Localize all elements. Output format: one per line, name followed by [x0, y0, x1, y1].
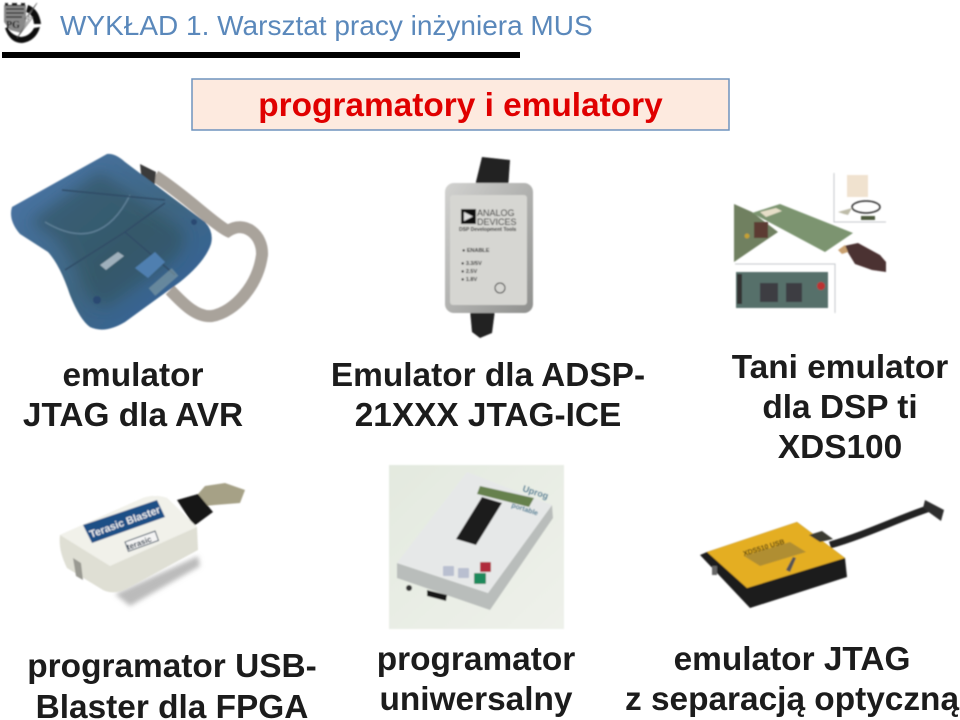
logo	[4, 3, 41, 43]
header rule	[2, 52, 520, 58]
dark inner tint	[30, 172, 184, 306]
label: emulator JTAG z separacją optyczną	[625, 641, 959, 718]
connector	[923, 500, 944, 521]
label: programator uniwersalny: programator	[377, 641, 575, 678]
photo: blue AVR JTAG emulator	[11, 154, 262, 330]
logo: PG	[6, 20, 20, 31]
photo: Terasic USB-Blaster: terasic	[126, 534, 153, 552]
photo: Terasic USB-Blaster: Terasic Blaster	[88, 504, 162, 541]
details	[744, 542, 806, 566]
label: Emulator dla ADSP-21XXX JTAG-ICE: 21XXX JTAG-ICE	[355, 397, 621, 434]
device branding: Uprog	[521, 483, 550, 501]
label: emulator JTAG dla AVR: JTAG dla AVR	[23, 397, 243, 434]
photo: universal programmer: portable	[510, 502, 539, 517]
photo: Analog Devices emulator: ● ENABLE	[462, 248, 490, 254]
frame lines	[735, 173, 886, 313]
connector port	[427, 590, 447, 601]
label: emulator JTAG dla AVR	[23, 357, 243, 434]
label: Tani emulator dla DSP ti XDS100: dla DSP ti	[762, 389, 918, 426]
heading box	[192, 79, 729, 130]
terasic logo	[125, 531, 158, 551]
photo: Analog Devices emulator: DEVICES	[477, 217, 517, 227]
label: Emulator dla ADSP-21XXX JTAG-ICE: Emulator dla ADSP-	[331, 357, 645, 394]
photo: Analog Devices emulator	[445, 157, 533, 338]
photo: XDS100 emulator boards	[734, 173, 886, 313]
blue label	[83, 500, 165, 543]
ZIF socket	[456, 497, 502, 545]
photo: yellow isolated JTAG emulator: XDS510 USB	[743, 539, 786, 558]
label: emulator JTAG z separacją optyczną: z separacją optyczną	[625, 681, 959, 718]
photo: yellow isolated JTAG emulator	[700, 500, 944, 608]
connector	[140, 164, 156, 190]
photo: Analog Devices emulator: ● 3.3/5V	[461, 261, 482, 267]
photo: Analog Devices emulator: ANALOG	[477, 208, 515, 218]
label: programator uniwersalny	[377, 641, 575, 718]
ribbon	[198, 483, 245, 506]
shadow	[115, 556, 200, 606]
label: Tani emulator dla DSP ti XDS100	[732, 349, 948, 466]
photo: Terasic USB-Blaster	[60, 483, 245, 606]
accessories	[847, 175, 868, 197]
photo: Analog Devices emulator: ● 1.8V	[461, 277, 477, 283]
heading box: programatory i emulatory	[258, 87, 663, 124]
label: programator USB-Blaster dla FPGA	[27, 648, 317, 720]
label: emulator JTAG dla AVR: emulator	[62, 357, 204, 394]
black case	[700, 522, 847, 608]
device body	[11, 154, 212, 330]
buttons	[443, 566, 454, 576]
body	[60, 496, 198, 592]
USB plug and cable	[844, 243, 886, 272]
USB port	[73, 558, 83, 580]
photo: Analog Devices emulator: ● 2.5V	[461, 269, 477, 275]
device logo and text	[461, 209, 476, 224]
photo: Analog Devices emulator: DSP Development Tools	[459, 227, 517, 233]
label: programator uniwersalny: uniwersalny	[380, 681, 573, 718]
cable straps	[474, 157, 510, 190]
photo background	[389, 465, 564, 629]
device front	[397, 505, 553, 610]
ribbon cable	[155, 176, 262, 316]
label: emulator JTAG z separacją optyczną: emulator JTAG	[674, 641, 910, 678]
title: WYKŁAD 1. Warsztat pracy inżyniera MUS	[60, 10, 593, 41]
photo: universal programmer	[389, 465, 564, 629]
target board	[734, 204, 778, 262]
label: Tani emulator dla DSP ti XDS100: XDS100	[778, 429, 902, 466]
yellow lid	[707, 522, 845, 588]
black connector	[177, 494, 213, 526]
device body	[445, 183, 533, 313]
label: programator USB-Blaster dla FPGA: programator USB-	[27, 648, 317, 685]
LCD display	[477, 486, 534, 507]
lower board	[736, 272, 828, 308]
green emulator board	[752, 204, 853, 252]
cable	[830, 508, 930, 545]
device top	[397, 472, 552, 593]
label: Emulator dla ADSP-21XXX JTAG-ICE	[331, 357, 645, 434]
label: Tani emulator dla DSP ti XDS100: Tani emulator	[732, 349, 948, 386]
